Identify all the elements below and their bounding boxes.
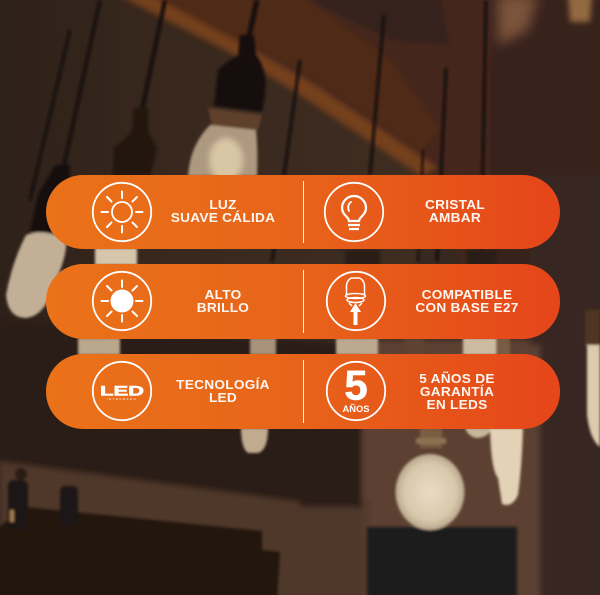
icon: sun outline [92,182,152,242]
wood ceiling [118,0,600,340]
text: alto brillo [196,287,249,315]
text: tecnología led: LED [208,390,237,405]
text: luz suave cálida: SUAVE CÁLIDA [170,210,275,225]
left bulb [6,232,66,318]
text: luz suave cálida [170,197,275,225]
text: cristal ambar: CRISTAL [425,197,485,212]
icon: bulb base with arrow [326,270,386,332]
text: 5 años de garantía en leds: EN LEDS [427,397,487,412]
text: tecnología led: TECNOLOGÍA [176,377,269,392]
lower walls [362,340,540,595]
cables [30,0,486,262]
icon: LED: LED [100,382,144,398]
icon: 5 años: AÑOS [342,404,369,415]
text: 5 años de garantía en leds [419,371,495,412]
icon: LED [92,360,152,422]
dark frame lower right [367,527,517,595]
picture frame centre [300,425,362,507]
icon: 5 años: 5 [344,362,367,408]
text: 5 años de garantía en leds: GARANTÍA [420,384,494,399]
panel: row 3 [46,354,560,429]
text: alto brillo: BRILLO [196,300,249,315]
lower small bulb [241,428,268,453]
top bulb [188,125,257,176]
right bulb [587,345,600,447]
text: luz suave cálida: LUZ [209,197,236,212]
icon: filled sun [92,270,152,332]
picture frame lower left [0,320,362,508]
lower tube bulbs [465,428,492,438]
text: tecnología led [176,377,270,405]
collar of top bulb [208,108,262,130]
icon: LED: INTEGRADO [106,397,137,401]
icon: 5 años [326,360,386,422]
text: alto brillo: ALTO [204,287,241,302]
shelf lower left [0,507,280,595]
text: compatible con base e27: COMPATIBLE [422,287,512,302]
light patches upper right [497,0,538,45]
right ceiling dark [490,0,600,340]
text: cristal ambar: AMBAR [429,210,481,225]
sockets [214,35,266,112]
bulb slivers between bars [95,248,137,265]
icon: light bulb [324,182,384,242]
text: 5 años de garantía en leds: 5 AÑOS DE [419,371,495,386]
panel: row 1 [46,175,560,249]
text: cristal ambar [425,197,485,225]
panel: row 2 [46,264,560,339]
large globe bulb [420,428,442,448]
text: compatible con base e27: CON BASE E27 [415,300,519,315]
text: compatible con base e27 [415,287,519,315]
